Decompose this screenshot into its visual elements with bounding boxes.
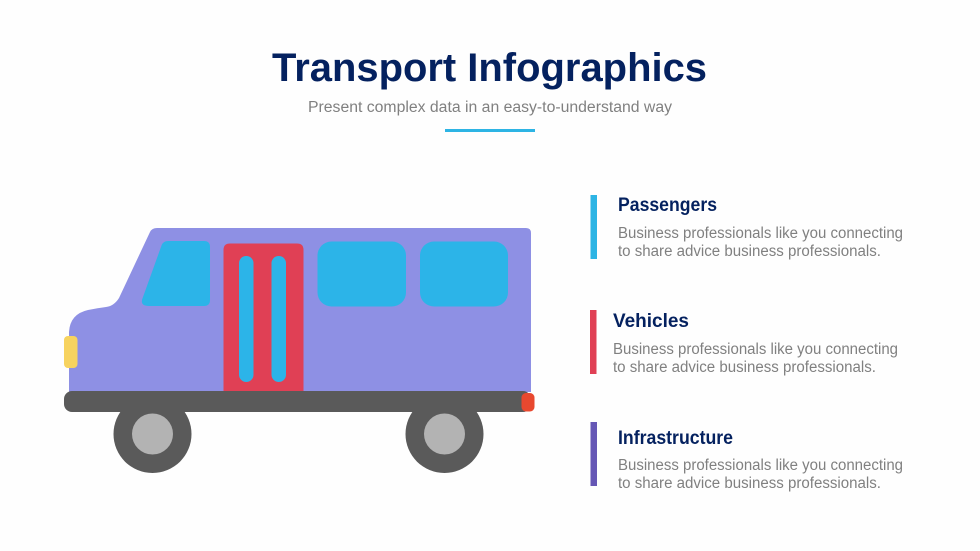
door window right — [272, 256, 286, 382]
item: Infrastructure — [590, 422, 903, 492]
bus body — [69, 228, 531, 392]
item: Vehicles — [590, 310, 898, 376]
illustration: bus — [64, 228, 534, 473]
heading: Vehicles — [613, 311, 689, 332]
headlight — [64, 336, 78, 368]
title: Transport Infographics — [272, 46, 707, 90]
rear wheel — [406, 395, 484, 473]
door — [224, 244, 304, 392]
description: to share advice business professionals. — [618, 475, 881, 492]
heading: Infrastructure — [618, 428, 733, 449]
chassis bar — [64, 391, 531, 412]
front wheel — [114, 395, 192, 473]
description: Business professionals like you connecting — [618, 457, 903, 474]
header — [272, 46, 707, 132]
description: to share advice business professionals. — [618, 243, 881, 260]
title underline — [445, 129, 535, 132]
description: to share advice business professionals. — [613, 359, 876, 376]
tail light — [522, 393, 534, 412]
accent bar — [590, 195, 597, 259]
middle window — [318, 242, 406, 306]
front window — [142, 241, 210, 306]
item: Passengers — [590, 195, 903, 260]
rear window — [420, 242, 508, 306]
accent bar — [590, 310, 596, 374]
heading: Passengers — [618, 195, 717, 216]
subtitle: Present complex data in an easy-to-understand way — [308, 99, 672, 116]
accent bar — [590, 422, 597, 486]
description: Business professionals like you connecting — [613, 341, 898, 358]
description: Business professionals like you connecting — [618, 225, 903, 242]
door window left — [239, 256, 254, 382]
